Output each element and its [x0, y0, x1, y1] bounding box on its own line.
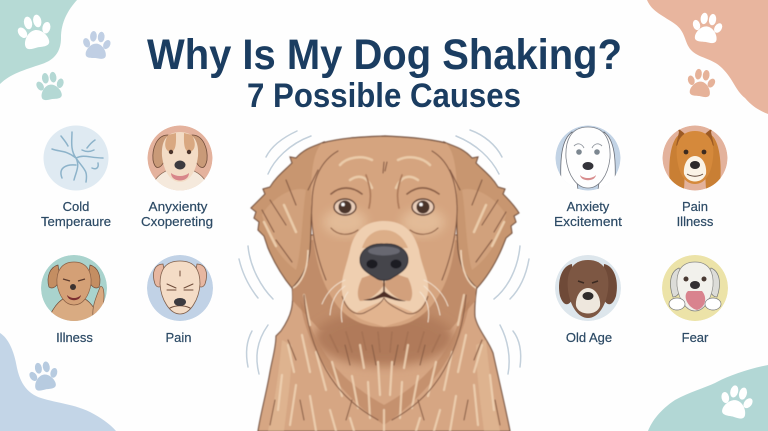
- muzzle top tone: [362, 230, 408, 248]
- corner blob: bottom right: [648, 365, 768, 431]
- ear and head fur strokes: [262, 151, 506, 280]
- nose: [360, 244, 408, 280]
- label: pain illness: Illness: [677, 214, 714, 229]
- right eye: [412, 199, 434, 215]
- label: pain: Pain: [165, 330, 192, 345]
- label: illness: Illness: [56, 330, 93, 345]
- left eye: [334, 199, 356, 215]
- eye patches: [323, 208, 367, 236]
- label: anxiety cxopereting: Cxopereting: [141, 214, 213, 229]
- icon: golden-red dog: [662, 126, 728, 190]
- icon: cold temperature: [44, 126, 108, 190]
- central dog illustration: [251, 136, 519, 431]
- paw: blue bottom left: [26, 359, 62, 392]
- label: anxiety excitement: Anxiety: [567, 199, 610, 214]
- chest fur strokes: [278, 295, 494, 431]
- label: anxiety excitement: [554, 199, 622, 229]
- shake lines around central dog: [239, 130, 529, 374]
- paw: blue top: [80, 30, 113, 60]
- left ear: [251, 142, 324, 288]
- chest shading: [268, 240, 500, 431]
- icon: old age dog: [555, 255, 621, 321]
- label: anxiety cxopereting: [141, 199, 213, 229]
- chin: [354, 300, 416, 327]
- paw: salmon right: [684, 67, 718, 98]
- icon: fear dog: [662, 255, 728, 321]
- label: cold temperature: Cold: [63, 199, 89, 214]
- ear lobes highlight: [262, 189, 506, 270]
- whiskers: [322, 280, 448, 322]
- corner blob: bottom left: [0, 333, 116, 431]
- label: old age: Old Age: [566, 330, 612, 345]
- under-eye creases: [331, 228, 438, 234]
- mouth: [363, 291, 406, 301]
- corner blob: top right: [647, 0, 768, 114]
- paw: teal left: [33, 70, 67, 101]
- paw: white top left: [13, 12, 56, 51]
- label: pain illness: Pain: [682, 199, 708, 214]
- paw: white bottom right: [716, 382, 757, 421]
- muzzle cheeks: [358, 272, 412, 301]
- head: [311, 136, 457, 327]
- muzzle: [342, 221, 428, 313]
- right ear: [444, 142, 519, 288]
- title: Why Is My Dog Shaking?: [147, 31, 622, 79]
- icon: anxiety dog: [148, 126, 212, 192]
- corner blob: top left: [0, 0, 77, 84]
- icon: white dog: [556, 126, 620, 190]
- label: cold temperature: [41, 199, 111, 229]
- paw: white top right: [689, 11, 725, 44]
- label: anxiety excitement: Excitement: [554, 214, 622, 229]
- brows: [331, 188, 439, 194]
- label: anxiety cxopereting: Anyxienty: [148, 199, 208, 214]
- label: fear: Fear: [682, 330, 709, 345]
- head top fur: [322, 136, 446, 143]
- label: cold temperature: Temperaure: [41, 214, 111, 229]
- dog chest: [258, 235, 510, 431]
- subtitle: 7 Possible Causes: [247, 77, 521, 115]
- label: pain illness: [677, 199, 714, 229]
- icon: pain dog: [147, 255, 213, 321]
- icon: illness dog: [41, 255, 107, 324]
